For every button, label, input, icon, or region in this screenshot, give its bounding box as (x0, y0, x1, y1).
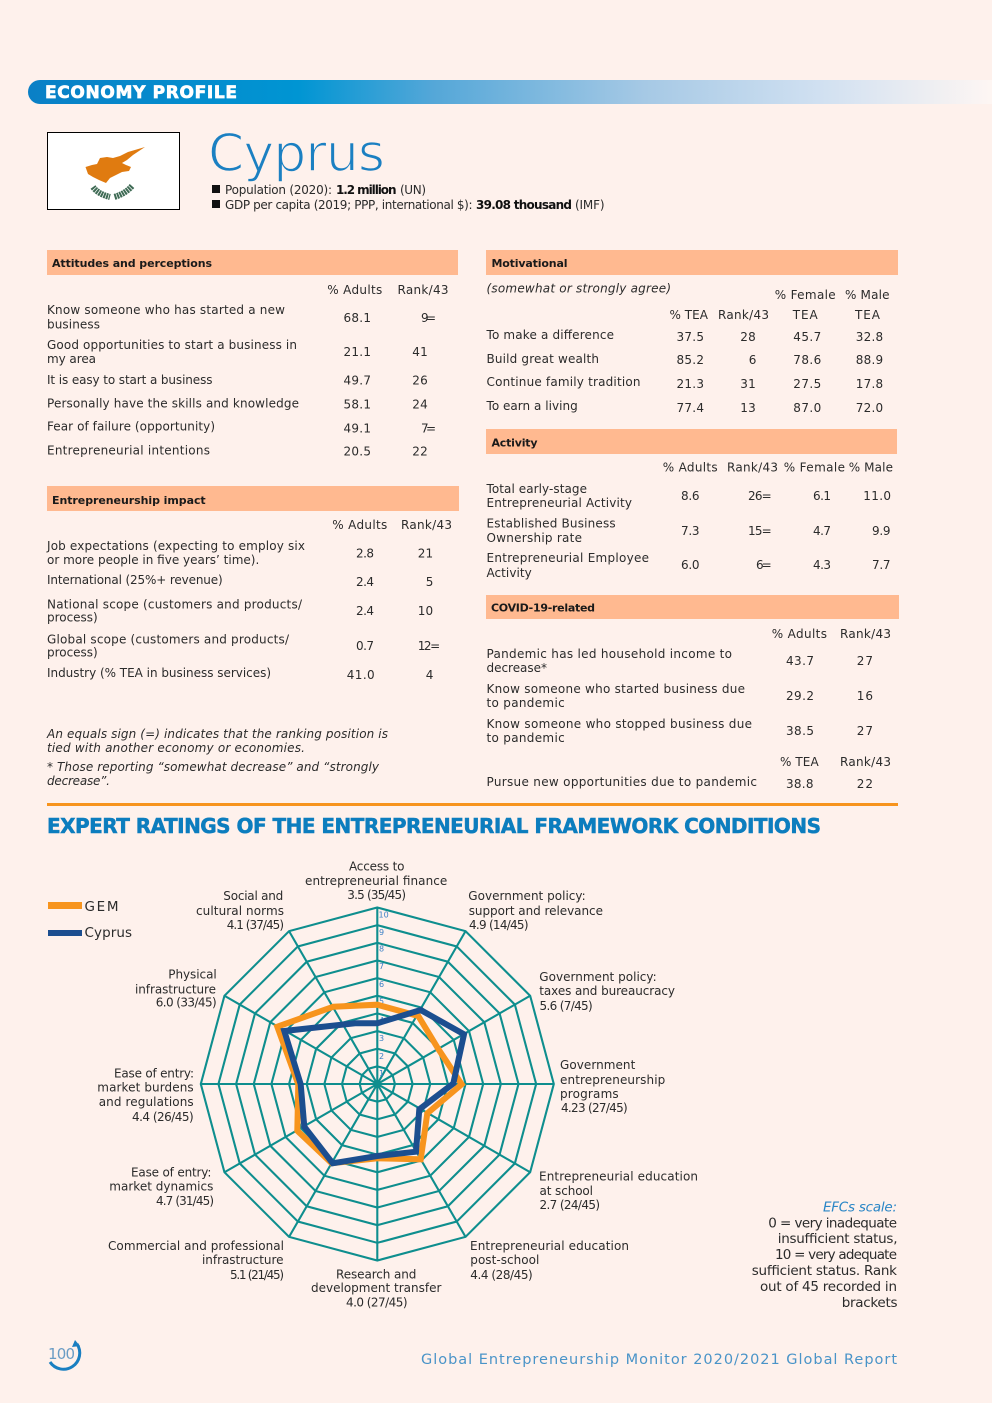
table rows: 49.7 (344, 374, 371, 388)
column headers (663, 461, 893, 475)
table rows (486, 328, 883, 415)
table rows: Total early-stage (486, 482, 587, 496)
panel: motivational (486, 250, 898, 415)
axis label: government programs: 4.23 (27/45) (561, 1101, 628, 1115)
axis label: taxes and bureaucracy: Government policy: (539, 970, 657, 984)
table rows: 72.0 (856, 401, 883, 415)
table rows: Know someone who stopped business due (486, 717, 752, 731)
scale tick labels: 1 (379, 1069, 384, 1078)
table rows: Know someone who has started a new (47, 303, 285, 317)
table rows: 6= (756, 558, 772, 572)
table rows: 4 (426, 668, 433, 682)
table rows: Build great wealth (486, 352, 599, 366)
final row (486, 775, 873, 791)
scale tick labels (378, 911, 389, 1078)
axis label: government support: support and relevance (469, 904, 603, 918)
table rows: 2.4 (356, 575, 374, 589)
table rows: 10 (418, 604, 433, 618)
table rows: 38.5 (786, 724, 814, 738)
axis label: education post-school: Entrepreneurial education (470, 1239, 629, 1253)
column headers: % Male (845, 288, 890, 302)
table rows: Entrepreneurial intentions (47, 444, 210, 458)
scale tick labels: 6 (379, 980, 384, 989)
table rows: Entrepreneurial Employee (486, 551, 649, 565)
data series: Cyprus (284, 1010, 464, 1163)
table rows: 4.7 (813, 524, 831, 538)
table rows: Pandemic has led household income to (486, 647, 732, 661)
axis label: commercial infrastructure (108, 1239, 284, 1282)
table rows: 8.6 (681, 489, 700, 503)
table rows: Established Business (486, 517, 616, 531)
table rows: process) (47, 611, 98, 625)
axis label: market dynamics (109, 1166, 214, 1208)
table rows: 85.2 (676, 353, 704, 367)
axis label: physical infrastructure (135, 967, 217, 1010)
key facts: population and GDP: Population (2020): (225, 183, 332, 197)
table rows: process) (47, 646, 98, 660)
column headers: % Adults (663, 461, 718, 475)
table rows: 77.4 (676, 401, 704, 415)
table rows: 6.1 (813, 489, 831, 503)
panel heading (47, 250, 458, 275)
column headers: % Female (775, 288, 836, 302)
table rows: 5 (426, 575, 433, 589)
scale tick labels: 4 (379, 1016, 384, 1025)
table rows: to pandemic (486, 731, 565, 745)
legend (48, 899, 132, 941)
scale note: EFCs scale: (823, 1200, 897, 1216)
table rows: International (25%+ revenue) (47, 573, 223, 587)
secondary column headers (780, 755, 891, 769)
table rows: 11.0 (863, 489, 891, 503)
axis label: physical infrastructure: 6.0 (33/45) (156, 996, 217, 1010)
table rows: Good opportunities to start a business in (47, 338, 297, 352)
column headers: % TEA (670, 308, 709, 322)
final row: Pursue new opportunities due to pandemic (486, 775, 757, 789)
table rows: Personally have the skills and knowledge (47, 397, 299, 411)
table rows: 9= (421, 311, 436, 325)
column headers: % Male (849, 461, 893, 475)
secondary column headers: Rank/43 (840, 755, 891, 769)
panel: attitudes and perceptions (47, 250, 458, 459)
axis label: education at school: Entrepreneurial education (539, 1170, 698, 1184)
column headers: TEA (792, 308, 818, 322)
table rows (486, 482, 891, 580)
column headers (327, 283, 448, 297)
scale tick labels: 5 (379, 997, 384, 1006)
panel: COVID-19-related (486, 595, 899, 791)
table rows: 27.5 (793, 377, 821, 391)
axis label: government support (468, 889, 603, 932)
axis label: taxes and bureaucracy: taxes and bureaucracy (539, 984, 675, 998)
footnotes: An equals sign (=) indicates that the ranking position is (46, 727, 388, 741)
axis label: education post-school (470, 1239, 629, 1282)
panel heading: Motivational (492, 257, 568, 270)
scale tick labels: 2 (379, 1052, 384, 1061)
table rows: 31 (740, 377, 756, 391)
column headers: % Female (784, 461, 845, 475)
table rows: 22 (412, 445, 428, 459)
column headers: % Adults (327, 283, 382, 297)
panel heading (47, 486, 459, 511)
table rows (47, 303, 436, 459)
column headers: TEA (854, 308, 881, 322)
table rows: business (47, 317, 100, 331)
axis label: social norms: 4.1 (37/45) (227, 918, 284, 932)
table rows: my area (47, 352, 96, 366)
panel heading (486, 429, 897, 454)
axis label: access to finance (305, 860, 447, 902)
axis label: access to finance: Access to (349, 860, 404, 874)
axis label: social norms: cultural norms (196, 904, 284, 918)
table rows: 17.8 (856, 377, 883, 391)
table rows: Job expectations (expecting to employ six (46, 539, 305, 553)
table rows: Industry (% TEA in business services) (47, 666, 271, 680)
axis label: R&D transfer: Research and (336, 1267, 416, 1281)
table rows (46, 539, 440, 682)
radar chart (201, 908, 554, 1260)
table rows: 27 (857, 724, 873, 738)
table rows: 78.6 (793, 353, 821, 367)
column headers: % Adults (772, 627, 827, 641)
panel heading (486, 595, 899, 619)
column headers: Rank/43 (398, 283, 448, 297)
page number (48, 1340, 80, 1369)
axis label: taxes and bureaucracy (539, 970, 675, 1013)
footnotes (46, 727, 388, 788)
scale note: insufficient status, (778, 1231, 898, 1247)
key facts: population and GDP: (IMF) (575, 198, 604, 212)
table rows: 15= (748, 524, 772, 538)
legend: GEM (84, 899, 118, 915)
header banner: economy profile (28, 80, 992, 104)
axis label: government support: Government policy: (468, 889, 586, 903)
table rows: 37.5 (676, 330, 704, 344)
table rows: 58.1 (344, 398, 371, 412)
table rows: It is easy to start a business (47, 373, 212, 387)
table rows: 6.0 (681, 558, 700, 572)
table rows: 21.3 (676, 377, 704, 391)
table rows: 41.0 (347, 668, 375, 682)
table rows: 20.5 (344, 445, 371, 459)
scale tick labels: 10 (378, 911, 389, 920)
key facts: population and GDP: GDP per capita (2019; PPP, international $): (225, 198, 472, 212)
table rows: 7.7 (872, 558, 890, 572)
axis label: government programs: Government (560, 1058, 636, 1072)
axis label: market burdens: Ease of entry: (114, 1066, 194, 1080)
scale tick labels: 9 (379, 928, 384, 937)
scale note: sufficient status. Rank (752, 1263, 897, 1279)
final row: 22 (857, 777, 873, 791)
axis label: market dynamics: Ease of entry: (131, 1166, 211, 1180)
axis label: market burdens: and regulations (99, 1095, 194, 1109)
panel: entrepreneurship impact (46, 486, 459, 682)
axis label: commercial infrastructure: infrastructure (202, 1253, 284, 1267)
table rows: 7= (421, 421, 436, 435)
axis label: R&D transfer: 4.0 (27/45) (346, 1296, 408, 1310)
table rows: 21 (418, 546, 433, 560)
table rows: 27 (857, 654, 873, 668)
axis label: market dynamics: 4.7 (31/45) (156, 1194, 214, 1208)
chart grid (201, 908, 554, 1260)
axis label: market burdens: 4.4 (26/45) (132, 1110, 194, 1124)
panel heading: Activity (492, 437, 538, 450)
axis label: R&D transfer: development transfer (311, 1281, 441, 1295)
key facts: population and GDP: 39.08 thousand (476, 198, 572, 212)
table rows: 41 (412, 345, 428, 359)
table rows: to pandemic (486, 696, 565, 710)
table rows: 6 (749, 353, 756, 367)
table rows: 26 (412, 374, 428, 388)
table rows: 16 (857, 689, 873, 703)
scale note: 0 = very inadequate (768, 1216, 897, 1232)
table rows: 13 (740, 401, 756, 415)
scale tick labels: 7 (379, 962, 384, 971)
table rows: 28 (740, 330, 756, 344)
key facts: population and GDP: 1.2 million (336, 183, 396, 197)
table rows: Ownership rate (486, 531, 582, 545)
axis label: government support: 4.9 (14/45) (469, 918, 528, 932)
table rows: National scope (customers and products/ (47, 597, 303, 611)
panel: activity (486, 429, 897, 580)
footnotes: decrease”. (47, 774, 110, 788)
axis label: government programs: programs (560, 1087, 619, 1101)
table rows: 2.4 (356, 604, 374, 618)
axis label: government programs (560, 1058, 665, 1115)
panel heading: Attitudes and perceptions (52, 257, 212, 270)
column headers (332, 518, 452, 532)
table rows: 45.7 (793, 330, 821, 344)
axis label: market dynamics: market dynamics (109, 1180, 213, 1194)
axis label: commercial infrastructure: 5.1 (21/45) (230, 1268, 284, 1282)
section heading: expert ratings: EXPERT RATINGS OF THE ENTREPRENEURIAL FRAMEWORK CONDITIONS (47, 814, 821, 838)
header banner: economy profile: ECONOMY PROFILE (45, 83, 237, 103)
footnotes: * Those reporting “somewhat decrease” and “strongly (47, 760, 380, 774)
table rows: decrease* (486, 661, 547, 675)
table rows: 68.1 (344, 311, 371, 325)
column headers: Rank/43 (718, 308, 769, 322)
axis label: market burdens: market burdens (97, 1081, 194, 1095)
axis label: education at school: 2.7 (24/45) (540, 1198, 600, 1212)
icon: flag of Cyprus (48, 132, 180, 210)
axis label: access to finance: entrepreneurial finance (305, 874, 447, 888)
axis label: physical infrastructure: Physical (168, 967, 217, 981)
table rows: Know someone who started business due (486, 682, 745, 696)
axis label: R&D transfer (311, 1267, 441, 1310)
qualifier note: (somewhat or strongly agree) (486, 282, 671, 296)
table rows: 2.8 (356, 546, 374, 560)
table rows: Fear of failure (opportunity) (47, 420, 215, 434)
axis label: physical infrastructure: infrastructure (135, 982, 216, 996)
table rows: 7.3 (681, 524, 700, 538)
table rows: 32.8 (856, 330, 883, 344)
panel heading (486, 250, 898, 275)
legend: Cyprus (84, 925, 132, 941)
final row: 38.8 (786, 777, 814, 791)
table rows: 9.9 (872, 524, 890, 538)
column headers (772, 627, 891, 641)
scale note (752, 1200, 898, 1311)
column headers: Rank/43 (840, 627, 891, 641)
scale note: out of 45 recorded in (760, 1279, 897, 1295)
panel heading: COVID-19-related (491, 602, 595, 615)
scale note: brackets (842, 1295, 898, 1311)
column headers: Rank/43 (401, 518, 452, 532)
table rows: 0.7 (356, 639, 374, 653)
axis label: education at school (539, 1170, 698, 1212)
table rows: 12= (418, 639, 440, 653)
key facts: population and GDP: (UN) (400, 183, 426, 197)
table rows: 88.9 (856, 353, 883, 367)
footer: report title: Global Entrepreneurship Monitor 2020/2021 Global Report (421, 1352, 897, 1368)
page number: 100 (48, 1345, 75, 1363)
axis label: commercial infrastructure: Commercial and professional (108, 1239, 284, 1253)
axis label: education at school: at school (540, 1184, 593, 1198)
table rows: Continue family tradition (486, 375, 640, 389)
table rows: 29.2 (786, 689, 814, 703)
footnotes: tied with another economy or economies. (47, 741, 305, 755)
column headers: Rank/43 (727, 461, 778, 475)
table rows: 21.1 (344, 345, 371, 359)
panel heading: Entrepreneurship impact (52, 494, 206, 507)
axis label: social norms: Social and (223, 889, 283, 903)
axis label: taxes and bureaucracy: 5.6 (7/45) (540, 999, 593, 1013)
table rows: 4.3 (813, 558, 831, 572)
table rows: Activity (486, 566, 532, 580)
table rows: 43.7 (786, 654, 814, 668)
table rows: 49.1 (344, 421, 371, 435)
axis label: education post-school: post-school (470, 1253, 539, 1267)
axis label: social norms (196, 889, 284, 932)
secondary column headers: % TEA (780, 755, 819, 769)
axis label: access to finance: 3.5 (35/45) (347, 888, 406, 902)
data series: GEM (277, 1005, 462, 1163)
scale tick labels: 3 (379, 1034, 384, 1043)
table rows: 24 (412, 398, 428, 412)
scale tick labels: 8 (379, 945, 384, 954)
title: country name: Cyprus (208, 124, 385, 184)
column headers: % Adults (332, 518, 387, 532)
axis label: education post-school: 4.4 (28/45) (470, 1268, 533, 1282)
table rows (486, 647, 873, 745)
table rows: To make a difference (486, 328, 614, 342)
column headers (670, 288, 890, 322)
table rows: Global scope (customers and products/ (47, 632, 290, 646)
table rows: 26= (748, 489, 772, 503)
table rows: To earn a living (486, 399, 578, 413)
table rows: or more people in five years’ time). (47, 553, 259, 567)
key facts: population and GDP (212, 183, 604, 212)
scale note: 10 = very adequate (775, 1247, 897, 1263)
table rows: Entrepreneurial Activity (486, 496, 632, 510)
table rows: 87.0 (793, 401, 821, 415)
axis label: government programs: entrepreneurship (560, 1073, 665, 1087)
axis label: market burdens (97, 1066, 194, 1124)
